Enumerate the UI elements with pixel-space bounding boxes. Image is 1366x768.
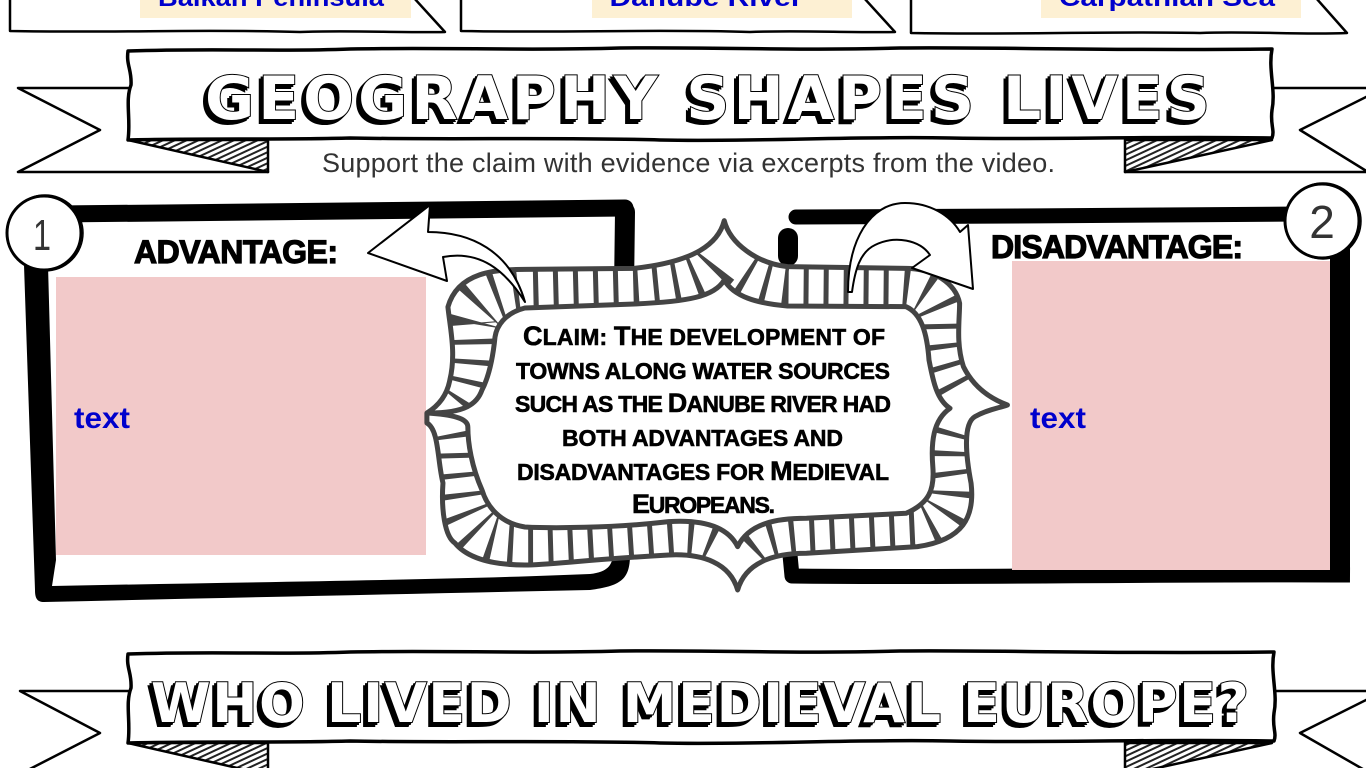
number badge 1: [7, 195, 83, 271]
arrow: to disadvantage: [848, 203, 973, 292]
claim text: EUROPEANS.: [632, 489, 775, 519]
banner: Geography Shapes Lives: [18, 48, 1366, 172]
claim text: BOTH ADVANTAGES AND: [562, 425, 843, 451]
claim text: SUCH AS THE DANUBE RIVER HAD: [515, 388, 891, 418]
number badge 2: 2: [1309, 196, 1335, 248]
arrow: to advantage: [368, 205, 525, 302]
top label shape: Balkan Peninsula: [10, 0, 445, 32]
heading: Who Lived in Medieval Europe?: WHO LIVED IN MEDIEVAL EUROPE?: [151, 672, 1249, 735]
top label shape: Danube River: [461, 0, 895, 32]
number badge 1: 1: [33, 211, 51, 260]
claim text: TOWNS ALONG WATER SOURCES: [516, 358, 890, 384]
heading: disadvantage: DISADVANTAGE:: [991, 229, 1243, 265]
panel: disadvantage: [788, 214, 1350, 577]
claim frame: [427, 221, 1007, 590]
claim text: DISADVANTAGES FOR MEDIEVAL: [517, 456, 889, 486]
top label shape: Carpathian Sea: [911, 0, 1347, 34]
pink answer box: disadvantage: [1012, 261, 1330, 570]
answer text: disadvantage: text: [1030, 402, 1086, 435]
pink answer box: advantage: [56, 277, 426, 555]
claim text: CLAIM: THE DEVELOPMENT OF: [523, 321, 885, 351]
banner: Who Lived in Medieval Europe?: [20, 651, 1366, 768]
answer text: advantage: text: [74, 402, 130, 435]
heading: advantage: ADVANTAGE:: [134, 234, 338, 270]
heading: Geography Shapes Lives: GEOGRAPHY SHAPES LIVES: [205, 64, 1210, 134]
subtitle: Support the claim with evidence via excerpts from the video.: [322, 148, 1055, 178]
number badge 2: [1285, 183, 1361, 259]
claim text: [515, 321, 891, 519]
panel: advantage: [24, 208, 630, 602]
